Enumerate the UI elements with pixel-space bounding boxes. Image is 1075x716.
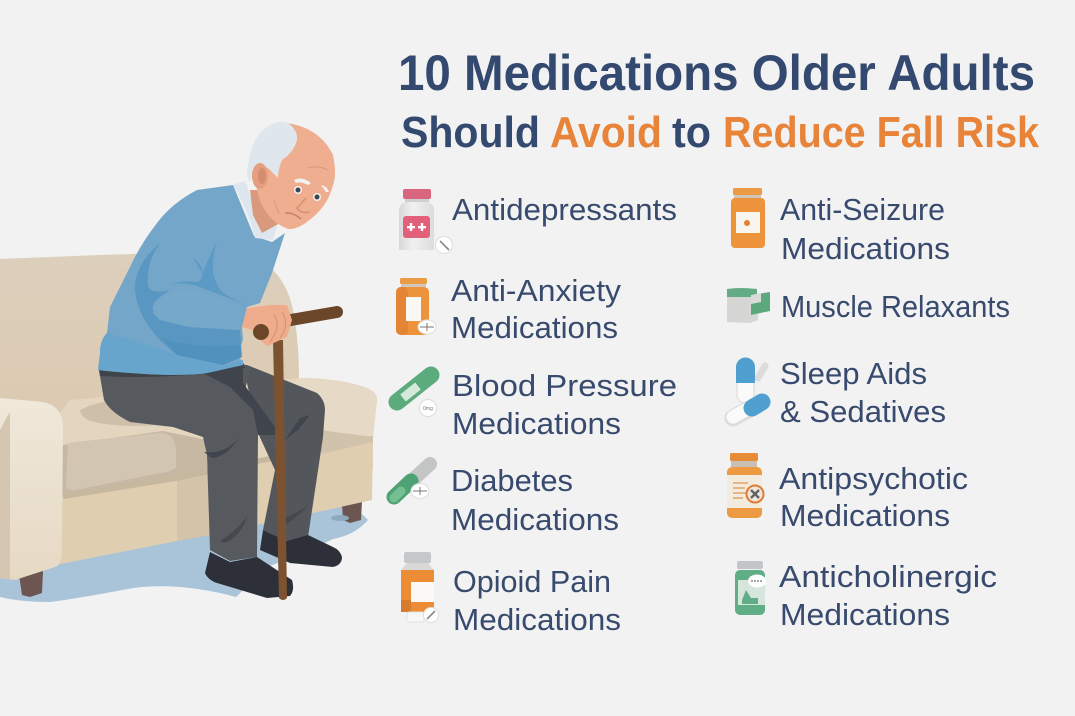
label (451, 463, 619, 537)
cane (273, 312, 337, 600)
sofa leg right (342, 501, 362, 523)
title line two (401, 108, 1039, 157)
icon: green tablet strip (397, 375, 436, 416)
title line one: 10 Medications Older Adults (398, 45, 1035, 101)
item: Sleep Aids & Sedatives (733, 356, 946, 429)
label: Antipsychotic (779, 461, 968, 496)
label: Muscle Relaxants (781, 289, 1010, 324)
hand (242, 305, 292, 346)
label: Medications (780, 498, 950, 533)
icon: green and white box (727, 288, 770, 323)
eyebrows (294, 179, 329, 192)
shoes (205, 530, 342, 598)
label (451, 273, 622, 345)
label: & Sedatives (780, 394, 946, 429)
forearm (153, 289, 243, 330)
item: Blood Pressure Medications (397, 368, 677, 441)
ear (252, 163, 268, 189)
label (780, 192, 950, 266)
sofa left arm (0, 398, 63, 580)
item: Antipsychotic Medications (727, 453, 968, 533)
label: Blood Pressure (452, 368, 677, 403)
icon: orange bottle (396, 278, 436, 335)
collar (233, 181, 277, 240)
title line two: Reduce Fall Risk (723, 108, 1039, 157)
sleeve fold (170, 240, 247, 305)
label (453, 564, 621, 637)
label: Sleep Aids (780, 356, 927, 391)
pants (99, 363, 325, 561)
title line two: Should (401, 108, 540, 157)
item: Anticholinergic Medications (735, 559, 997, 632)
sofa (0, 254, 377, 597)
label (779, 461, 968, 533)
label: Anti-Anxiety (451, 273, 622, 308)
item: Anti-Seizure Medications (731, 188, 950, 266)
label: Medications (451, 310, 618, 345)
hair (247, 122, 297, 182)
label: Medications (453, 602, 621, 637)
label: Diabetes (451, 463, 573, 498)
nose and mouth (297, 198, 310, 212)
icon: orange bottle with warning mark (727, 453, 764, 518)
label: Antidepressants (452, 192, 677, 227)
icon: blue and white capsules (733, 358, 765, 418)
item: Diabetes Medications (394, 463, 619, 537)
label (452, 368, 677, 441)
icon: green bottle (735, 561, 766, 615)
sweater shading (135, 243, 242, 365)
sweater (98, 185, 285, 375)
label: Medications (781, 231, 950, 266)
label: Medications (780, 597, 950, 632)
label: Medications (451, 502, 619, 537)
item: Opioid Pain Medications (401, 552, 621, 637)
icon: green and grey capsule (394, 464, 430, 498)
sofa leg left (19, 571, 43, 597)
label: Medications (452, 406, 621, 441)
title (398, 45, 1039, 157)
icon: pink-label bottle (399, 189, 452, 254)
label (780, 356, 946, 429)
eyes (294, 186, 302, 194)
illustration: older man seated on sofa with cane (0, 122, 377, 602)
label (779, 559, 997, 632)
title line two: to (672, 108, 711, 157)
floor shadow (0, 500, 368, 602)
title line two: Avoid (550, 108, 662, 157)
item: Antidepressants (399, 189, 677, 254)
item: Muscle Relaxants (727, 288, 1010, 324)
label: Opioid Pain (453, 564, 611, 599)
icon: orange bottle with dot label (731, 188, 765, 248)
icon: green tablet strip: 0mg (423, 406, 433, 412)
head and face (247, 122, 335, 233)
label: Anti-Seizure (780, 192, 945, 227)
icon: orange bottle with grey cap (401, 552, 438, 622)
label: Anticholinergic (779, 559, 997, 594)
item: Anti-Anxiety Medications (396, 273, 622, 345)
